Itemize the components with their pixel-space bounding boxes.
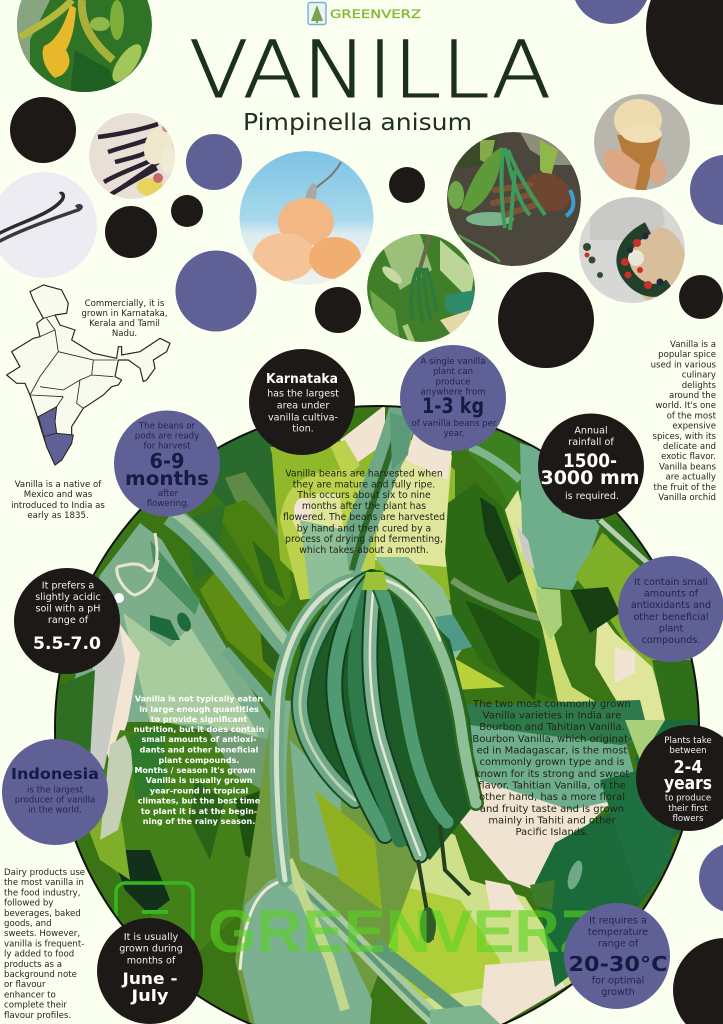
text: harvesting: which takes about a month.	[299, 545, 429, 556]
callout: 6-9 months harvest	[114, 410, 220, 516]
text: nutrition and season: Months / season it's grown	[134, 766, 256, 775]
text: harvesting: flowered. The beans are harvested	[283, 512, 445, 523]
text: varieties: Vanilla varieties in India are	[483, 710, 621, 722]
callout: antioxidants: plant	[659, 624, 683, 634]
photo: cake with berries	[579, 195, 686, 303]
centre pale leaf	[272, 440, 455, 610]
text: varieties: Bourbon and Tahitian Vanilla.	[479, 722, 625, 733]
callout: antioxidants: compounds.	[642, 635, 700, 646]
callout: antioxidants	[618, 556, 723, 662]
callout: 6-9 months harvest: for harvest	[143, 442, 191, 452]
text: varieties: Bourbon Vanilla, which originat-	[472, 734, 632, 745]
text: varieties: other hand, has a more floral	[479, 792, 625, 803]
callout: temperature: temperature	[588, 927, 648, 938]
photo: vanilla flower	[17, 0, 152, 95]
callout: 1-3 kg yield: year.	[443, 429, 465, 439]
text: dairy products: beverages, baked	[4, 909, 81, 919]
callout: rainfall: Annual	[574, 426, 608, 436]
text: popular spice: delicate and	[663, 442, 716, 452]
right dark leaf	[445, 483, 555, 700]
text: popular spice: spices, with its	[653, 432, 717, 442]
callout: 2-4 years: between	[669, 746, 707, 756]
text: nutrition and season: year-round in tropical	[150, 786, 248, 796]
callout: soil pH: range of	[48, 615, 89, 626]
text: varieties: The two most commonly grown	[472, 699, 631, 710]
watermark logo	[114, 881, 590, 952]
callout: temperature: growth	[601, 987, 635, 998]
text: varieties: Pacific Islands.	[515, 827, 589, 838]
callout: Indonesia	[2, 739, 108, 845]
teal leaf	[520, 443, 602, 590]
text: nutrition and season: Vanilla is usually grown	[146, 776, 253, 785]
callout: soil pH	[14, 568, 120, 674]
text: nutrition and season: to plant it is at the begin-	[141, 807, 257, 816]
text: native of Mexico: introduced to India as	[11, 501, 105, 511]
callout: antioxidants: amounts of	[644, 588, 699, 600]
text: harvesting: This occurs about six to nine	[296, 490, 431, 501]
callout: Karnataka: area under	[277, 400, 329, 412]
callout: 1-3 kg yield: 1-3 kg	[422, 394, 484, 418]
text: harvesting: by hand and then cured by a	[297, 524, 431, 534]
callout: temperature	[564, 903, 670, 1009]
text: nutrition and season: dants and other beneficial	[140, 746, 259, 754]
callout: rainfall: 3000 mm	[540, 468, 640, 489]
callout: temperature: range of	[598, 938, 639, 950]
text: nutrition and season: in large enough quantities	[139, 705, 259, 714]
text: popular spice: exotic flavor.	[661, 452, 716, 462]
callout: 2-4 years: to produce	[665, 794, 711, 804]
text: harvesting: Vanilla beans are harvested when	[285, 468, 443, 480]
callout: soil pH: slightly acidic	[35, 592, 101, 603]
photo: vanilla beans on lilac white	[0, 172, 97, 278]
callout: 6-9 months harvest: 6-9	[150, 449, 184, 473]
callout: 1-3 kg yield: plant can	[433, 367, 473, 377]
text: varieties: ed in Madagascar, is the most	[477, 746, 627, 756]
text: dairy products: the most vanilla in	[4, 878, 84, 888]
callout: June - July: grown during	[119, 944, 183, 954]
text: dairy products: enhancer to	[4, 990, 56, 1000]
callout: 1-3 kg yield: of vanilla beans per	[412, 419, 497, 429]
callout: antioxidants: other beneficial	[633, 612, 709, 623]
callout: 6-9 months harvest: flowering.	[147, 499, 189, 509]
text: popular spice: culinary	[682, 371, 716, 381]
callout: 2-4 years: 2-4	[674, 757, 702, 778]
pods	[276, 578, 476, 880]
text: popular spice: are actually	[665, 473, 716, 483]
callout: 1-3 kg yield: A single vanilla	[420, 357, 486, 367]
lower left greens	[104, 730, 260, 951]
callout: antioxidants: It contain small	[634, 577, 708, 588]
callout: rainfall	[538, 414, 644, 520]
bottom left pale leaf and stems	[235, 700, 420, 1024]
text: dairy products: flavour profiles.	[4, 1011, 71, 1021]
text: dairy products: vanilla is frequent-	[4, 939, 84, 949]
logo: Greenverz: GREENVERZ	[330, 7, 421, 21]
text: varieties: flavor. Tahitian Vanilla, on the	[478, 780, 626, 792]
text: dairy products: followed by	[4, 899, 53, 909]
text: nutrition and season: climates, but the best time	[138, 796, 261, 806]
text: dairy products: complete their	[4, 1001, 67, 1011]
callout: Karnataka: has the largest	[267, 388, 339, 400]
callout: 1-3 kg yield	[400, 345, 506, 451]
callout: Karnataka: tion.	[292, 424, 314, 434]
text: dairy products: or flavour	[4, 980, 46, 990]
text: native of Mexico: early as 1835.	[27, 511, 89, 521]
far right leaf	[575, 533, 691, 686]
photo: green vanilla pod bunch	[367, 234, 475, 342]
top right leaf	[465, 430, 522, 503]
text: nutrition and season: plant compounds.	[159, 756, 239, 765]
text: varieties: and fruity taste and is grown	[480, 804, 624, 815]
text: commercially grown: Kerala and Tamil	[89, 319, 160, 329]
subtitle: Pimpinella anisum	[243, 110, 472, 136]
text: dairy products: the food industry,	[4, 888, 80, 898]
callout: Indonesia: Indonesia	[11, 765, 99, 783]
text: native of Mexico: Vanilla is a native of	[15, 480, 102, 490]
callout: Indonesia: in the world.	[28, 806, 82, 816]
text: commercially grown: grown in Karnataka,	[81, 309, 168, 319]
callout: June - July: June -	[121, 969, 178, 988]
text: nutrition and season: to provide significant	[151, 715, 247, 724]
text: nutrition and season: small amounts of antioxi-	[142, 735, 256, 744]
text: popular spice: Vanilla is a	[670, 340, 716, 350]
text: dairy products: products as a	[4, 960, 62, 970]
callout: 6-9 months harvest: The beans or	[138, 422, 196, 432]
callout: temperature: 20-30°C	[568, 952, 668, 976]
callout: Karnataka	[249, 349, 355, 455]
callout: antioxidants: antioxidants and	[631, 600, 711, 611]
text: popular spice: expensive	[672, 422, 716, 432]
text: varieties: mainly in Tahiti and other	[488, 816, 617, 826]
text: varieties: commonly grown type and is	[480, 757, 624, 768]
callout: rainfall: rainfall of	[568, 437, 614, 448]
callout: 6-9 months harvest: pods are ready	[135, 432, 199, 442]
callout: 6-9 months harvest: after	[158, 489, 179, 499]
text: dairy products: ly added to food	[4, 950, 74, 960]
text: popular spice: world. It's one	[655, 401, 716, 411]
dark gaps behind pods	[300, 590, 478, 860]
lower right base	[410, 834, 572, 1010]
callout: rainfall: is required.	[565, 491, 619, 502]
callout: June - July: months of	[127, 956, 176, 966]
text: commercially grown: Nadu.	[112, 329, 137, 339]
main illustration: vanilla pods in a large circle	[50, 400, 720, 1024]
text: harvesting: process of drying and fermenting,	[285, 534, 443, 545]
callout: soil pH: soil with a pH	[36, 604, 100, 614]
watermark logo: GREENVERZ	[208, 898, 598, 965]
callout: 1-3 kg yield: produce	[436, 378, 470, 388]
text: popular spice: of the most	[667, 411, 717, 421]
text: nutrition and season: nutrition, but it does contain	[134, 725, 265, 734]
callout: soil pH: It prefers a	[42, 580, 94, 592]
photo: ice cream scoops	[240, 151, 374, 285]
callout: June - July: It is usually	[124, 932, 179, 943]
text: dairy products: sweets. However,	[4, 929, 80, 939]
callout: temperature: for optimal	[592, 976, 644, 986]
text: popular spice: Vanilla beans	[659, 462, 717, 472]
text: popular spice: used in various	[651, 360, 717, 370]
callout: Karnataka: vanilla cultiva-	[268, 412, 338, 424]
callout: soil pH: 5.5-7.0	[33, 634, 101, 654]
text: dairy products: Dairy products use	[4, 868, 85, 878]
text: popular spice: popular spice	[658, 350, 716, 360]
photo: ice cream cone	[594, 94, 690, 190]
callout: Indonesia: producer of vanilla	[15, 796, 95, 806]
photo: dried vanilla pods with flower	[89, 113, 177, 199]
text: popular spice: around the	[669, 391, 716, 401]
callout: 1-3 kg yield: anywhere from	[421, 388, 485, 398]
text: popular spice: the fruit of the	[654, 483, 716, 493]
callout: rainfall: 1500-	[563, 450, 617, 472]
yellow stripe	[505, 490, 595, 702]
text: popular spice: delights	[682, 381, 717, 391]
text: harvesting: months after the plant has	[302, 501, 426, 512]
text: commercially grown: Commercially, it is	[85, 299, 165, 309]
callout: 2-4 years: their first	[668, 804, 708, 814]
photo: hand holding green beans	[445, 132, 581, 266]
text: harvesting: they are mature and fully ripe.	[293, 480, 435, 490]
text: popular spice: Vanilla orchid	[658, 493, 716, 503]
callout: June - July	[97, 918, 203, 1024]
callout: Indonesia: is the largest	[27, 786, 84, 796]
callout: Karnataka: Karnataka	[266, 371, 338, 387]
callout: 2-4 years	[636, 725, 723, 831]
callout: 2-4 years: years	[664, 774, 712, 794]
callout: 2-4 years: flowers	[672, 814, 704, 824]
text: nutrition and season: ning of the rainy season.	[143, 817, 255, 826]
text: nutrition and season: Vanilla is not typically eaten	[135, 694, 263, 704]
title: VANILLA	[189, 26, 551, 116]
callout: June - July: July	[130, 986, 169, 1005]
callout: 2-4 years: Plants take	[664, 736, 712, 746]
left big leaf	[74, 523, 270, 739]
text: dairy products: background note	[4, 970, 77, 980]
callout: 6-9 months harvest: months	[125, 467, 209, 490]
sage area under harvest text	[375, 557, 468, 660]
map of India with southern states highlighted	[7, 285, 170, 465]
text: native of Mexico: Mexico and was	[24, 490, 93, 500]
text: dairy products: goods, and	[4, 919, 52, 929]
logo: Greenverz	[308, 2, 421, 24]
callout: temperature: It requires a	[589, 916, 647, 926]
text: varieties: known for its strong and sweet	[475, 769, 629, 780]
